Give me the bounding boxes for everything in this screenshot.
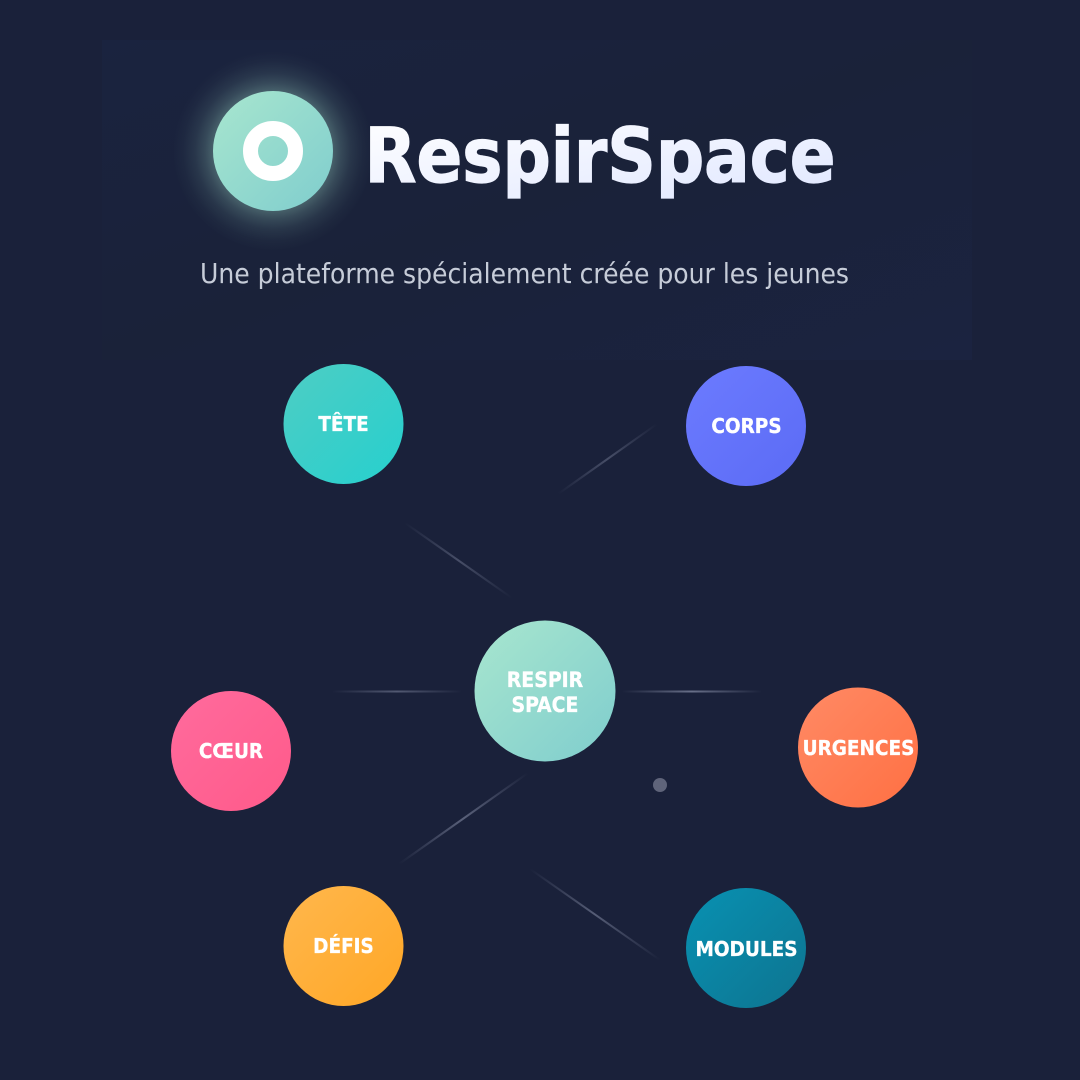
node: Corps: CORPS <box>711 414 782 438</box>
connector: cœur to centre <box>332 690 462 692</box>
connector: tête to centre <box>405 523 512 598</box>
connector: défis to centre <box>399 773 528 864</box>
connector: corps to centre <box>558 424 657 494</box>
node: Défis: DÉFIS <box>313 933 374 958</box>
node: Corps <box>686 366 806 486</box>
icon: RespirSpace logo <box>173 51 373 251</box>
node: centre RespirSpace: SPACE <box>512 693 578 717</box>
node: Cœur: CŒUR <box>199 739 263 763</box>
node: Cœur <box>171 691 291 811</box>
node: Urgences <box>798 688 918 808</box>
node: centre RespirSpace <box>474 620 616 762</box>
node: Modules: MODULES <box>696 937 797 961</box>
node: Défis <box>284 886 404 1006</box>
node: Urgences: URGENCES <box>803 736 914 760</box>
node: Tête <box>284 364 404 484</box>
node: Modules <box>686 888 806 1008</box>
subtitle: Une plateforme spécialement créée pour les jeunes <box>200 257 849 290</box>
node: Tête: TÊTE <box>318 411 369 436</box>
connector: modules to centre <box>530 869 660 960</box>
decorative dot <box>653 778 667 792</box>
title: RespirSpace <box>364 111 836 200</box>
connector: urgences to centre <box>622 690 762 692</box>
panel: header background <box>102 40 972 360</box>
node: centre RespirSpace: RESPIR <box>507 668 584 692</box>
